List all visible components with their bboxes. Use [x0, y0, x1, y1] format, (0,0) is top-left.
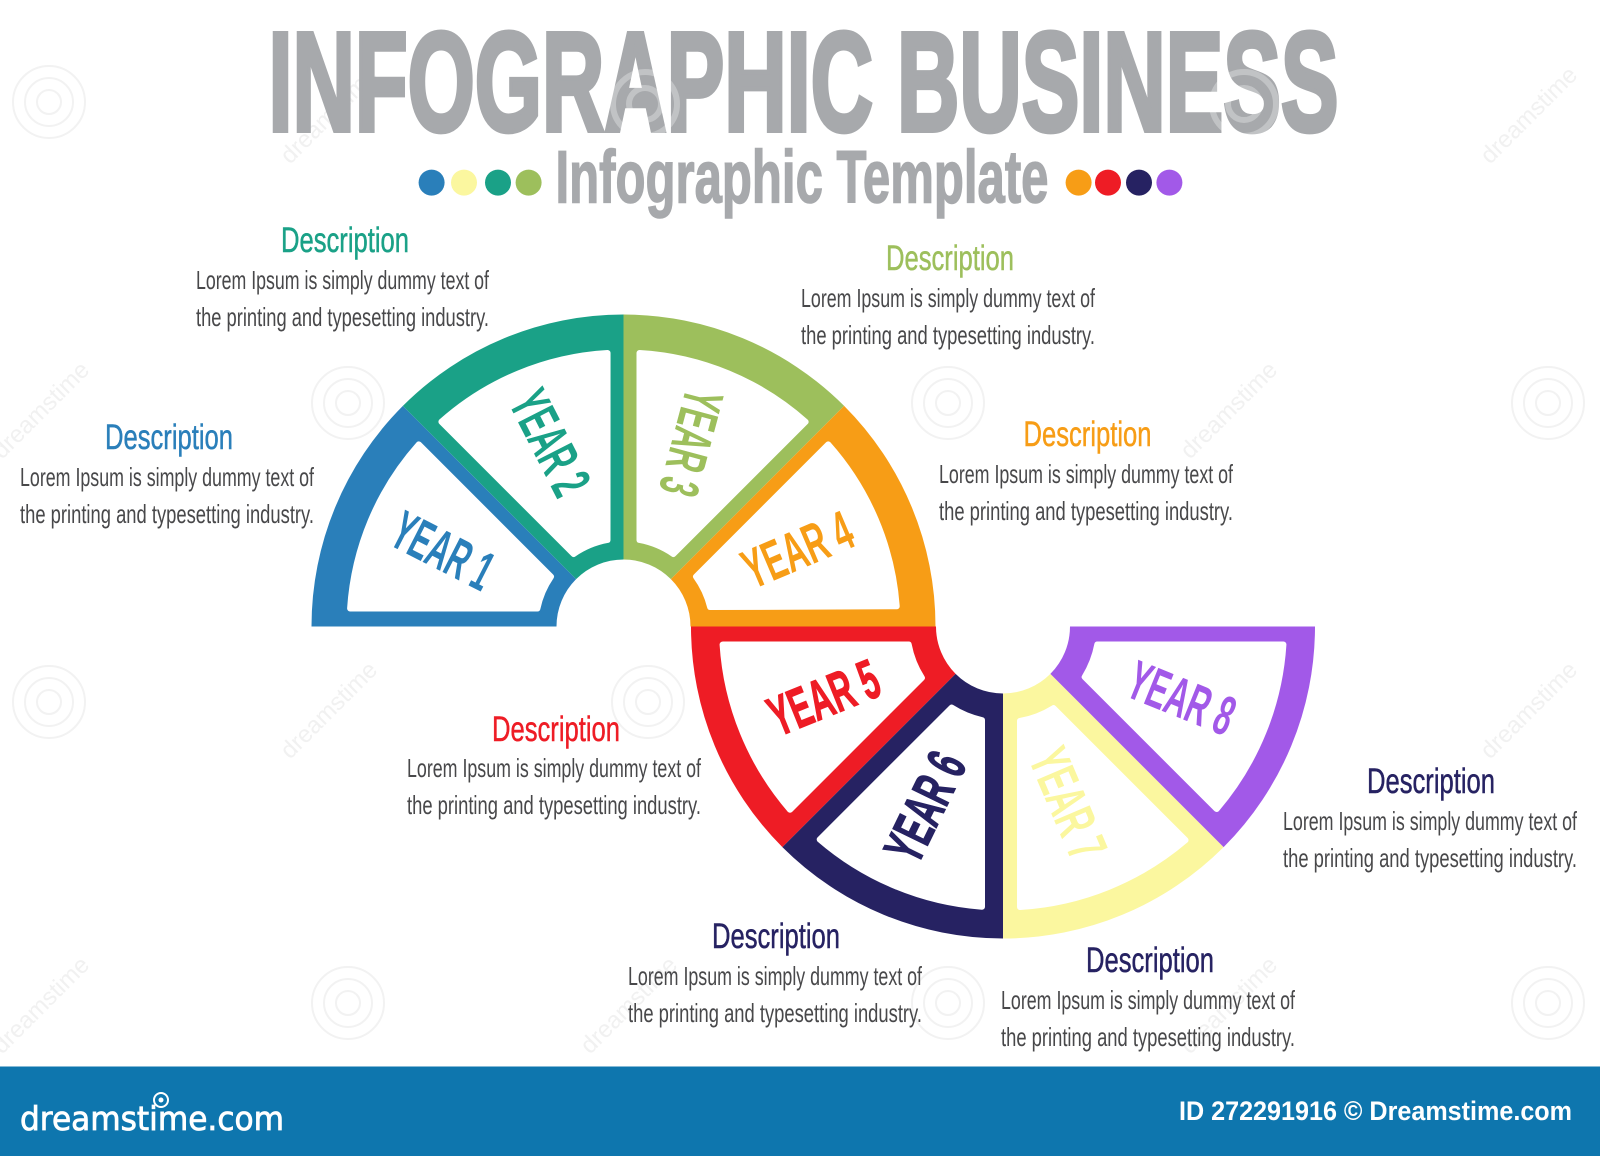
description: year 3: the printing and typesetting industry. [801, 320, 1095, 350]
description: year 1 [20, 418, 315, 529]
description: year 1: Description [105, 418, 233, 457]
lower semicircle chart [626, 504, 1315, 1003]
description: year 4: Description [1024, 415, 1152, 454]
description: year 5: Lorem Ipsum is simply dummy text of [407, 753, 702, 783]
label: year 5: YEAR 5 [759, 647, 888, 748]
upper semicircle chart [312, 250, 1000, 749]
description: year 4 [939, 415, 1234, 526]
title watermark overlay [613, 72, 1276, 136]
footer bar [0, 1066, 1600, 1156]
description: year 8 [1283, 762, 1578, 873]
description: year 3: Lorem Ipsum is simply dummy text of [801, 283, 1096, 313]
description: year 6: Lorem Ipsum is simply dummy text of [628, 961, 923, 991]
description: year 3: Description [886, 239, 1014, 278]
watermark pattern: dreamstime [1475, 61, 1583, 169]
label: year 1: YEAR 1 [382, 498, 505, 603]
label: year 8: YEAR 8 [1119, 648, 1244, 748]
legend dots left [419, 170, 542, 196]
footer image id: ID 272291916 © Dreamstime.com [1179, 1096, 1572, 1126]
description: year 4: Lorem Ipsum is simply dummy text of [939, 459, 1234, 489]
segment: year 1 [312, 406, 576, 626]
description: year 2: Description [281, 221, 409, 260]
description: year 7: the printing and typesetting industry. [1001, 1022, 1295, 1052]
segment: year 2 [403, 250, 746, 593]
subtitle: Infographic Template [556, 136, 1048, 218]
description: year 2: the printing and typesetting industry. [196, 302, 489, 332]
segment: year 5 [626, 504, 969, 847]
segment: year 8 [1050, 626, 1315, 847]
description: year 6: the printing and typesetting industry. [628, 998, 922, 1028]
watermark pattern: dreamstime [275, 656, 383, 764]
watermark pattern: dreamstime [575, 951, 683, 1059]
watermark pattern: dreamstime [1175, 951, 1283, 1059]
description: year 5: Description [492, 710, 620, 749]
description: year 5: the printing and typesetting industry. [407, 790, 701, 820]
description: year 2 [196, 221, 490, 332]
label: year 3: YEAR 3 [647, 383, 736, 503]
label: year 7: YEAR 7 [1017, 738, 1120, 869]
description: year 7: Description [1086, 941, 1214, 980]
description: year 5 [407, 710, 702, 820]
legend dots right [1066, 170, 1182, 196]
label: year 6: YEAR 6 [871, 742, 978, 872]
watermark pattern: dreamstime [275, 61, 383, 169]
watermark pattern: dreamstime [1175, 356, 1283, 464]
label: year 4: YEAR 4 [733, 498, 862, 601]
description: year 1: Lorem Ipsum is simply dummy text of [20, 462, 315, 492]
segment: year 6 [782, 674, 1003, 938]
description: year 6 [628, 917, 923, 1028]
segment: year 4 [657, 406, 1000, 749]
description: year 7 [1001, 941, 1296, 1052]
segment: year 3 [624, 314, 844, 579]
watermark pattern: dreamstime [1475, 656, 1583, 764]
segment: year 7 [881, 660, 1224, 1003]
description: year 8: Description [1367, 762, 1495, 801]
description: year 2: Lorem Ipsum is simply dummy text of [196, 265, 490, 295]
description: year 3 [801, 239, 1096, 350]
footer logo: dreamstime.com [20, 1099, 284, 1138]
description: year 1: the printing and typesetting industry. [20, 499, 314, 529]
label: year 2: YEAR 2 [497, 379, 603, 506]
description: year 7: Lorem Ipsum is simply dummy text of [1001, 985, 1296, 1015]
description: year 6: Description [712, 917, 840, 956]
description: year 4: the printing and typesetting industry. [939, 496, 1233, 526]
